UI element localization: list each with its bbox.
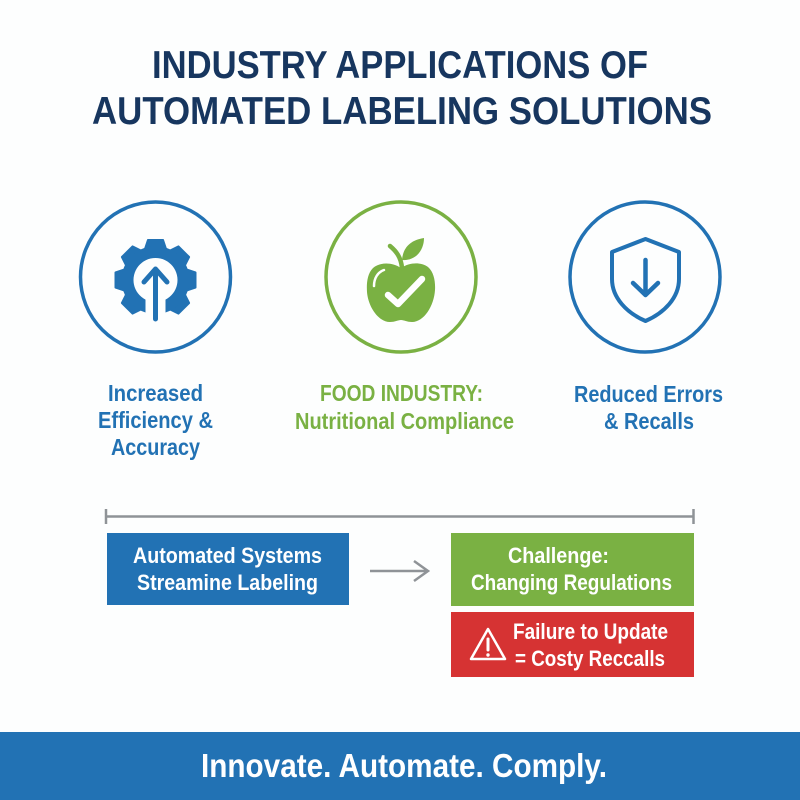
label: increased efficiency and accuracy: Accuracy — [111, 434, 200, 460]
icon: warning triangle — [471, 629, 505, 659]
label: reduced errors and recalls: Reduced Errors — [574, 381, 723, 407]
icon: gear with up arrow — [80, 202, 230, 352]
label: reduced errors and recalls: & Recalls — [604, 408, 694, 434]
title: INDUSTRY APPLICATIONS OF — [152, 44, 648, 87]
box: automated systems — [107, 533, 349, 605]
label: increased efficiency and accuracy — [98, 380, 213, 460]
icon: apple with check mark — [326, 202, 476, 352]
box: failure warning: Failure to Update — [513, 619, 668, 644]
bracket line — [106, 509, 694, 524]
footer banner — [0, 732, 800, 800]
box: challenge: Changing Regulations — [471, 570, 672, 595]
box: failure warning — [451, 612, 694, 677]
footer banner: Innovate. Automate. Comply. — [201, 747, 607, 784]
box: automated systems: Automated Systems — [133, 543, 322, 568]
label: increased efficiency and accuracy: Increased — [108, 380, 203, 406]
icon: shield with down arrow — [570, 202, 720, 352]
arrow — [370, 561, 428, 581]
label: increased efficiency and accuracy: Efficiency & — [98, 407, 213, 433]
title: AUTOMATED LABELING SOLUTIONS — [92, 90, 712, 133]
title — [92, 44, 712, 133]
box: automated systems: Streamine Labeling — [137, 570, 318, 595]
box: failure warning: = Costy Reccalls — [515, 646, 665, 671]
box: challenge — [451, 533, 694, 606]
box: challenge: Challenge: — [508, 543, 609, 568]
label: food industry nutritional compliance: Nutritional Compliance — [295, 408, 514, 434]
label: food industry nutritional compliance: FOOD INDUSTRY: — [320, 380, 483, 406]
label: food industry nutritional compliance — [295, 380, 514, 434]
label: reduced errors and recalls — [574, 381, 723, 434]
